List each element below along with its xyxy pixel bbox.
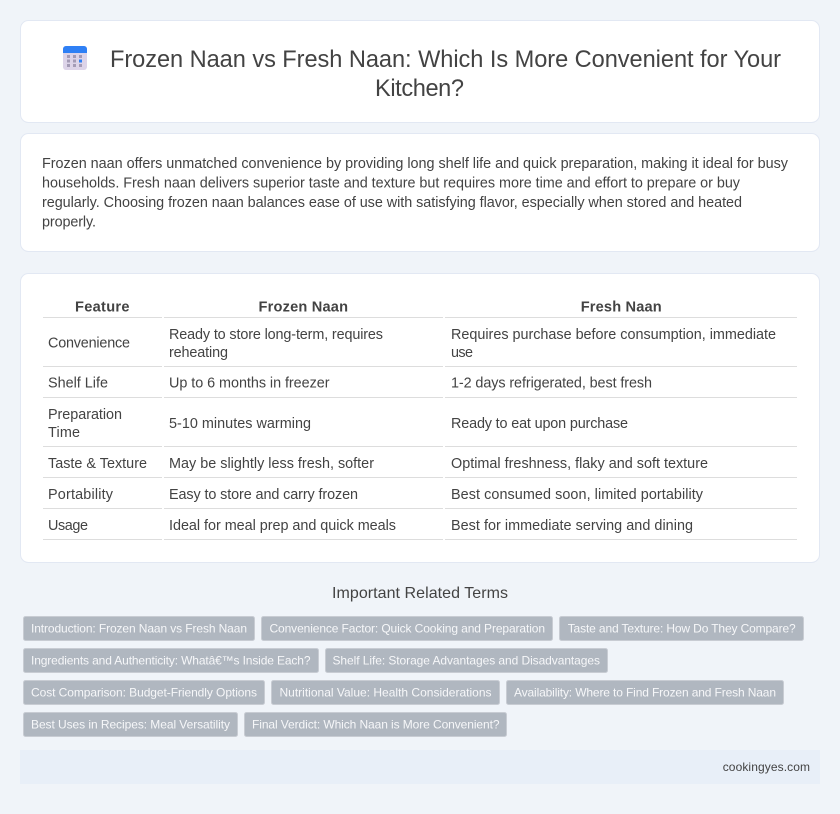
row: preparation time: 5-10 minutes warming bbox=[169, 416, 311, 432]
tag bbox=[560, 616, 804, 640]
tag bbox=[272, 680, 500, 704]
panel: introduction text: properly. bbox=[42, 215, 96, 231]
tag: Ingredients and Authenticity: Whatâ€™s Inside Each? bbox=[31, 653, 311, 667]
row: portability bbox=[48, 487, 704, 503]
panel: introduction text: regularly. Choosing frozen naan balances ease of use with satisfying flavor, especially when stored and heated bbox=[42, 195, 742, 211]
header panel bbox=[20, 20, 820, 122]
tag bbox=[262, 616, 552, 640]
row: taste and texture: Taste & Texture bbox=[48, 456, 147, 472]
row: preparation time: Time bbox=[48, 425, 80, 441]
tag: Cost Comparison: Budget-Friendly Options bbox=[31, 685, 257, 699]
tag bbox=[24, 712, 238, 736]
tag bbox=[24, 680, 264, 704]
row: convenience: Requires purchase before consumption, immediate bbox=[451, 327, 776, 343]
row: portability: Easy to store and carry frozen bbox=[169, 487, 358, 503]
tag: Convenience Factor: Quick Cooking and Preparation bbox=[270, 621, 545, 635]
table header row: Feature bbox=[75, 300, 130, 316]
row: shelf life bbox=[48, 376, 652, 392]
tag: Taste and Texture: How Do They Compare? bbox=[568, 621, 796, 635]
title bbox=[110, 47, 781, 102]
row: convenience: use bbox=[451, 345, 473, 361]
panel: introduction text: households. Fresh naan delivers superior taste and texture but requires more time and effort to prepare or buy bbox=[42, 176, 741, 192]
row: usage bbox=[48, 518, 693, 534]
row: shelf life: Up to 6 months in freezer bbox=[169, 376, 330, 392]
title: Frozen Naan vs Fresh Naan: Which Is More Convenient for Your bbox=[110, 47, 781, 73]
footer bbox=[20, 750, 820, 784]
footer: cookingyes.com bbox=[723, 760, 810, 774]
panel: introduction text bbox=[20, 134, 820, 252]
heading: important related terms: Important Related Terms bbox=[332, 585, 508, 602]
tag: Best Uses in Recipes: Meal Versatility bbox=[31, 717, 230, 731]
tag bbox=[244, 712, 506, 736]
row: convenience: Convenience bbox=[48, 336, 130, 352]
tag: Nutritional Value: Health Considerations bbox=[280, 685, 492, 699]
row: portability: Portability bbox=[48, 487, 114, 503]
panel: introduction text: Frozen naan offers unmatched convenience by providing long shelf life and quick preparation, making it ideal for busy bbox=[42, 156, 789, 172]
table header row bbox=[75, 300, 662, 316]
icon: calendar bbox=[63, 46, 87, 70]
row: shelf life: 1-2 days refrigerated, best fresh bbox=[451, 376, 652, 392]
row: preparation time bbox=[48, 407, 628, 441]
table header row: Fresh Naan bbox=[581, 300, 662, 316]
row: taste and texture bbox=[48, 456, 708, 472]
tag bbox=[24, 648, 318, 672]
tag bbox=[24, 616, 254, 640]
panel: related term tags bbox=[24, 616, 804, 736]
row: taste and texture: May be slightly less fresh, softer bbox=[169, 456, 374, 472]
row: preparation time: Preparation bbox=[48, 407, 122, 423]
tag bbox=[506, 680, 784, 704]
tag: Introduction: Frozen Naan vs Fresh Naan bbox=[31, 621, 247, 635]
tag bbox=[326, 648, 608, 672]
row: convenience: Ready to store long-term, requires bbox=[169, 327, 383, 343]
row: preparation time: Ready to eat upon purchase bbox=[451, 416, 628, 432]
row: usage: Usage bbox=[48, 518, 88, 534]
row: taste and texture: Optimal freshness, flaky and soft texture bbox=[451, 456, 708, 472]
tag: Final Verdict: Which Naan is More Convenient? bbox=[252, 717, 500, 731]
row: usage: Ideal for meal prep and quick meals bbox=[169, 518, 396, 534]
row: shelf life: Shelf Life bbox=[48, 376, 108, 392]
row: convenience: reheating bbox=[169, 345, 228, 361]
table header row: Frozen Naan bbox=[258, 300, 348, 316]
tag: Shelf Life: Storage Advantages and Disadvantages bbox=[332, 653, 600, 667]
row: usage: Best for immediate serving and dining bbox=[451, 518, 693, 534]
row: portability: Best consumed soon, limited portability bbox=[451, 487, 704, 503]
panel: comparison table bbox=[20, 274, 820, 562]
row: convenience bbox=[48, 327, 776, 361]
title: Kitchen? bbox=[375, 76, 464, 102]
tag: Availability: Where to Find Frozen and Fresh Naan bbox=[514, 685, 776, 699]
